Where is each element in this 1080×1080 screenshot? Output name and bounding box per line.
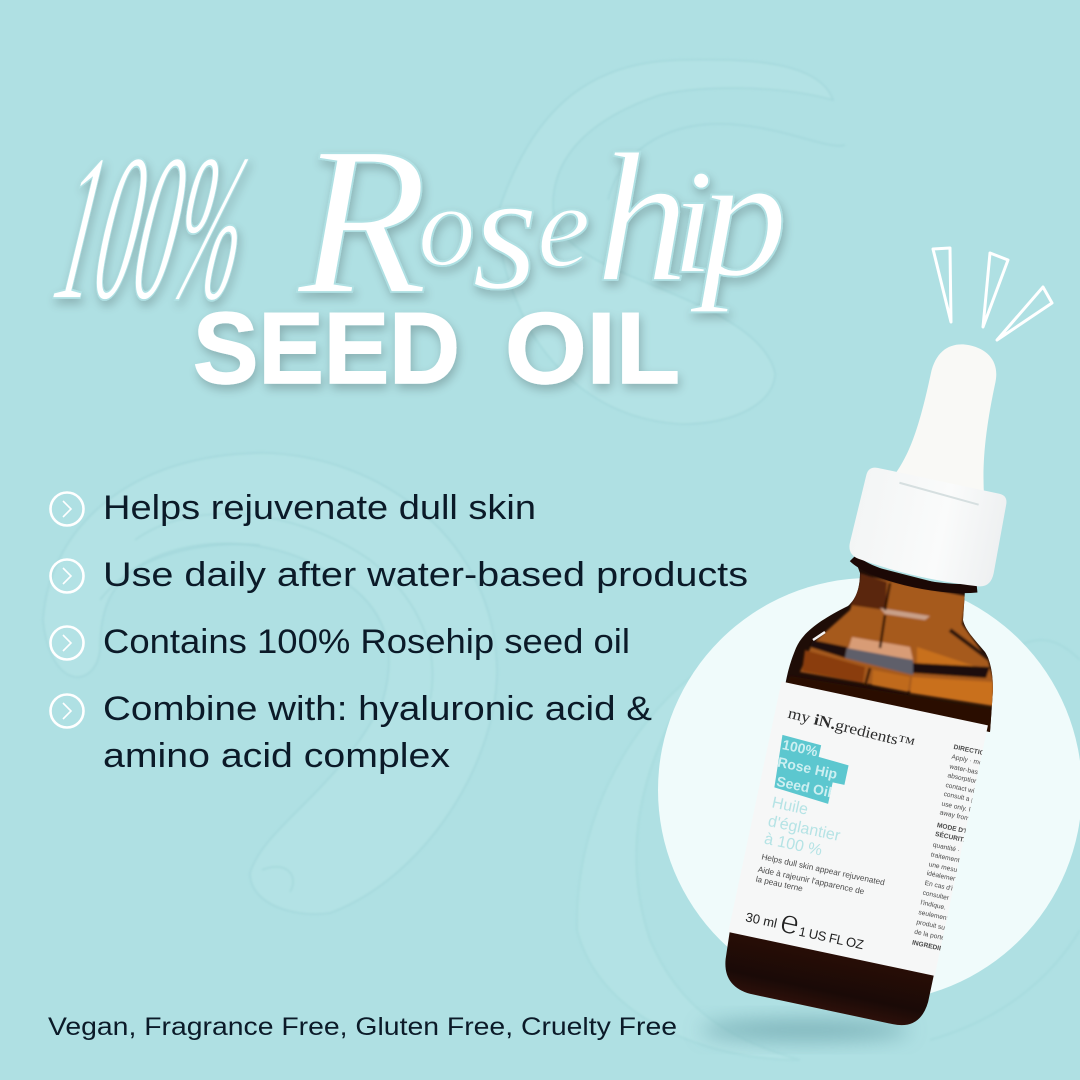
title script: 100% Rosehip: 100% — [42, 110, 265, 344]
bullet item 4: amino acid complex — [103, 737, 450, 775]
title script: 100% Rosehip — [42, 103, 787, 344]
directions column: DIRECTIONS — [953, 744, 995, 759]
decorative gel swirl: top — [499, 60, 845, 424]
dropper cap — [846, 465, 1010, 591]
title script: 100% Rosehip: R — [296, 103, 428, 338]
title: SEED OIL — [193, 293, 680, 405]
title: SEED OIL: SEED — [193, 293, 460, 405]
bullet item 1: Helps rejuvenate dull skin — [103, 489, 536, 527]
benefit list — [50, 489, 748, 775]
volume: 30 ml — [744, 909, 779, 931]
bullet item 3: Contains 100% Rosehip seed oil — [103, 623, 630, 661]
title script: 100% Rosehip: i — [672, 139, 714, 305]
product description: Aide à rajeunir l'apparence de — [757, 865, 866, 896]
white circle behind bottle — [658, 578, 1080, 1002]
directions column: water-base — [948, 763, 982, 777]
directions column: quantité · m — [932, 842, 968, 856]
product name tag: 100% — [781, 736, 820, 760]
title script: 100% Rosehip: h — [596, 116, 688, 321]
directions column: l'indique. — [920, 899, 947, 912]
dropper bulb — [892, 335, 1015, 498]
directions column: une mesure — [928, 861, 964, 875]
product description: la peau terne — [755, 875, 804, 893]
directions column: absorption. — [947, 772, 980, 786]
bullet item 4 — [50, 690, 652, 775]
french product name: Huile — [770, 794, 810, 819]
amber glass body — [786, 567, 993, 732]
directions column: de la portée — [914, 929, 949, 943]
product label: 1 US FL OZ — [797, 924, 865, 952]
product name tag: Seed Oil — [775, 773, 833, 800]
directions column: MODE D'EM — [936, 822, 975, 837]
icon: sparkle lines above dropper — [933, 248, 1052, 340]
directions column: contact with — [945, 782, 981, 796]
directions column: idéalement — [926, 870, 959, 884]
product label — [728, 682, 1000, 978]
footer claims: Vegan, Fragrance Free, Gluten Free, Cruelty Free — [48, 1013, 677, 1041]
directions column: SÉCURITAIR — [934, 829, 975, 846]
product name tag: Rose Hip — [776, 754, 839, 782]
french product name: à 100 % — [763, 831, 824, 859]
decorative gel swirl: left — [43, 453, 497, 914]
directions column: use only. Re — [941, 801, 978, 815]
title: SEED OIL: OIL — [505, 293, 680, 405]
title script: 100% Rosehip: e — [537, 159, 590, 292]
directions column: En cas d'i — [924, 880, 954, 893]
bullet item 4: Combine with: hyaluronic acid & — [103, 690, 652, 728]
directions column: consulter — [922, 890, 950, 902]
product description — [755, 852, 886, 910]
french product name: d'églantier — [766, 813, 842, 845]
directions column: consult a ph — [943, 791, 979, 805]
french product name — [763, 794, 846, 863]
directions column: traitement. — [930, 851, 962, 865]
product description: Helps dull skin appear rejuvenated — [761, 852, 886, 887]
dropper collar — [853, 558, 977, 589]
directions column — [912, 744, 983, 950]
directions column: produit sur — [916, 919, 948, 932]
directions column: seulement. — [918, 909, 951, 923]
product name tag — [770, 735, 852, 806]
directions column: Apply · moist — [951, 754, 990, 768]
brand name: my iN.gredients™ — [786, 705, 916, 753]
title script: 100% Rosehip: s — [472, 137, 538, 325]
title script: 100% Rosehip: o — [418, 163, 476, 290]
product label: e — [777, 902, 803, 943]
directions column: INGREDIENT — [911, 939, 953, 955]
bullet item 2: Use daily after water-based products — [103, 556, 748, 594]
directions column: away from — [939, 809, 971, 823]
bottle shadow — [700, 1019, 910, 1041]
decorative gel swirl: bottom right — [577, 640, 1080, 1060]
bottle base — [718, 926, 935, 1030]
title script: 100% Rosehip: p — [689, 119, 788, 313]
product bottle — [725, 344, 1006, 1026]
